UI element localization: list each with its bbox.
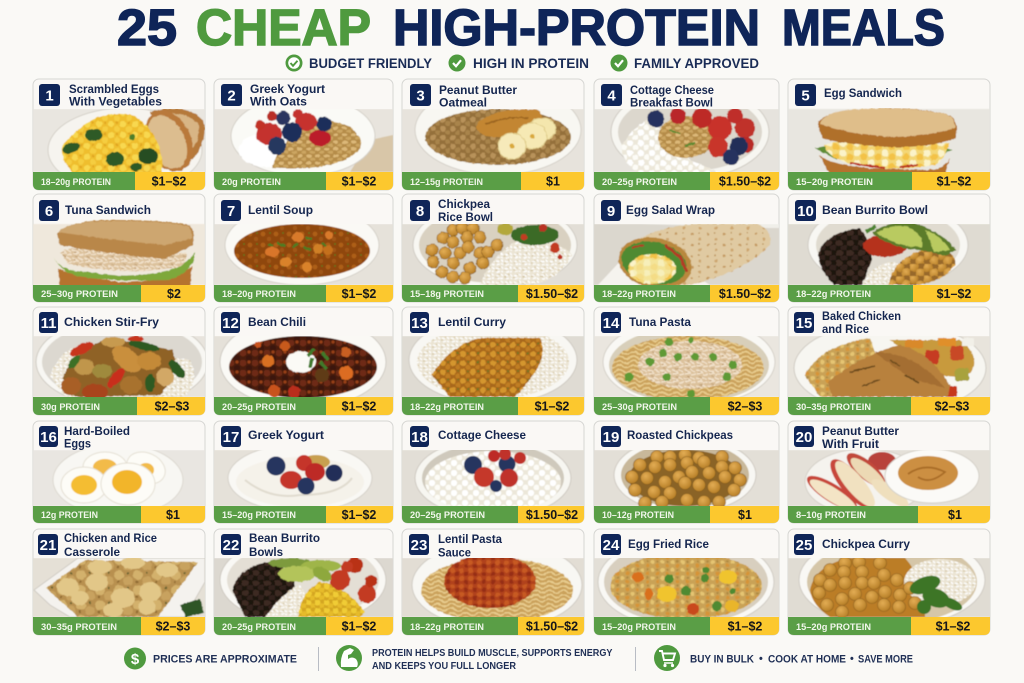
card 21: chicken and rice casserole: [33, 529, 205, 635]
protein label: 25–30g PROTEIN: [41, 289, 118, 300]
protein label: 20–25g PROTEIN: [410, 510, 485, 521]
price: [710, 285, 779, 302]
badge 24: [601, 534, 621, 555]
badge 21: 21: [40, 537, 56, 554]
badge 22: 22: [223, 537, 239, 554]
price: [137, 397, 205, 415]
protein label: 20–25g PROTEIN: [602, 177, 677, 188]
price: [710, 506, 779, 523]
badge 7: 7: [227, 203, 235, 220]
meal name: Greek Yogurt: [250, 82, 325, 96]
protein label: [594, 506, 710, 523]
card 8: chickpea rice bowl: [402, 194, 584, 302]
price: $1–$2: [936, 620, 970, 634]
subtitle badges: [286, 54, 759, 72]
meal name: Tuna Sandwich: [65, 203, 151, 217]
food photo: [402, 450, 584, 506]
food photo: [594, 109, 779, 172]
badge 23: [409, 534, 429, 555]
protein label: 20–25g PROTEIN: [222, 622, 296, 633]
badge 2: [221, 84, 242, 106]
protein label: 15–20g PROTEIN: [222, 510, 296, 521]
badge 24: 24: [603, 537, 620, 554]
icon: dollar: $: [131, 651, 140, 668]
price: $1–$2: [152, 174, 186, 188]
food photo: [402, 224, 584, 285]
title: [117, 0, 945, 56]
meal name: Bowls: [249, 545, 283, 559]
protein label: 18–20g PROTEIN: [222, 289, 296, 300]
meal name: [438, 532, 502, 560]
badge 3: 3: [416, 88, 425, 104]
protein label: [33, 172, 135, 190]
badge 13: 13: [411, 315, 428, 332]
price: $1.50–$2: [526, 620, 578, 634]
meal name: Peanut Butter: [439, 83, 517, 97]
price: [518, 397, 584, 415]
meal name: Sauce: [438, 546, 471, 560]
protein label: [788, 285, 913, 302]
card 3: peanut butter oatmeal: [402, 79, 584, 190]
badge 5: [795, 84, 816, 106]
badge 11: 11: [41, 315, 56, 332]
protein label: [402, 285, 518, 302]
meal name: Chicken Stir-Fry: [64, 315, 159, 329]
protein label: 18–22g PROTEIN: [602, 289, 676, 300]
price: [326, 617, 393, 635]
food photo: [402, 541, 584, 629]
meal name: Egg Fried Rice: [628, 537, 709, 551]
badge 9: [601, 200, 621, 221]
meal name: With Vegetables: [69, 94, 162, 108]
meal name: Lentil Pasta: [438, 532, 502, 546]
badge 10: 10: [797, 203, 814, 220]
title: HIGH-PROTEIN: [393, 0, 760, 56]
meal name: Lentil Soup: [248, 203, 313, 217]
badge 23: 23: [411, 537, 427, 554]
food photo: [788, 450, 990, 506]
protein label: 15–18g PROTEIN: [410, 289, 484, 300]
meal name: Rice Bowl: [438, 210, 493, 224]
price: [911, 397, 990, 415]
card 6: tuna sandwich: [33, 194, 205, 302]
note: savings tips: SAVE MORE: [858, 654, 913, 666]
meal name: Chicken and Rice: [64, 531, 157, 545]
card 25: chickpea curry: [788, 529, 990, 635]
price: [518, 506, 584, 523]
price: [326, 397, 393, 415]
note: protein benefits: AND KEEPS YOU FULL LONGER: [372, 661, 517, 672]
price: [326, 506, 393, 523]
price: [710, 397, 779, 415]
badge 25: [794, 534, 814, 555]
badge 1: 1: [45, 88, 54, 104]
price: $1–$2: [937, 174, 971, 188]
meal name: and Rice: [822, 322, 869, 336]
label: high in protein: HIGH IN PROTEIN: [473, 56, 589, 71]
badge 17: 17: [223, 429, 239, 446]
meal name: Scrambled Eggs: [69, 82, 159, 96]
food photo: [214, 109, 393, 172]
badge 3: [410, 84, 431, 106]
badge 5: 5: [801, 88, 810, 104]
protein label: 20–25g PROTEIN: [222, 402, 296, 413]
meal name: Bean Burrito: [249, 531, 320, 545]
food photo: [594, 336, 779, 397]
price: [518, 285, 584, 302]
badge 19: [601, 426, 621, 447]
price: $1: [546, 174, 560, 188]
price: $1.50–$2: [719, 174, 771, 188]
badge 20: 20: [796, 429, 812, 446]
badge 15: 15: [796, 315, 812, 332]
protein label: [33, 506, 141, 523]
price: $2–$3: [728, 400, 762, 414]
price: [326, 285, 393, 302]
meal name: [64, 424, 130, 450]
price: $2–$3: [935, 400, 969, 414]
meal name: Lentil Curry: [438, 315, 506, 329]
protein label: [214, 285, 326, 302]
food photo: [788, 108, 990, 174]
protein label: [214, 397, 326, 415]
card 1: scrambled eggs with vegetables: [33, 79, 205, 192]
badge 17: [221, 426, 241, 447]
card 23: lentil pasta sauce: [402, 529, 584, 635]
protein label: [788, 506, 918, 523]
icon: check family approved: [610, 54, 628, 72]
note: savings tips: [690, 653, 913, 666]
badge 25: 25: [796, 537, 812, 554]
protein label: [594, 397, 710, 415]
price: $1.50–$2: [526, 287, 578, 301]
price: $1–$2: [342, 400, 376, 414]
meal name: Peanut Butter: [822, 424, 899, 438]
meal name: Tuna Pasta: [629, 315, 691, 329]
meal name: [439, 83, 517, 110]
badge 9: 9: [607, 203, 615, 220]
protein label: 12–15g PROTEIN: [410, 177, 483, 188]
food photo: [33, 220, 205, 287]
food photo: [33, 557, 205, 617]
note: savings tips: •: [759, 653, 763, 665]
footer: [124, 645, 913, 672]
protein label: 30–35g PROTEIN: [796, 402, 871, 413]
card 11: chicken stir-fry: [33, 307, 208, 415]
card 5: egg sandwich: [788, 79, 990, 190]
card 16: hard-boiled eggs: [33, 421, 205, 523]
price: [135, 172, 205, 190]
food photo: [594, 450, 779, 506]
protein label: 18–22g PROTEIN: [410, 622, 484, 633]
note: savings tips: BUY IN BULK: [690, 654, 754, 666]
protein label: [214, 172, 326, 190]
food photo: [33, 109, 205, 172]
protein label: [788, 617, 911, 635]
price: $1–$2: [937, 287, 971, 301]
price: [141, 506, 205, 523]
protein label: [402, 506, 518, 523]
icon: flexed arm: [336, 645, 362, 671]
protein label: [788, 397, 911, 415]
meal name: Egg Sandwich: [824, 86, 902, 100]
card 13: lentil curry: [402, 307, 584, 415]
meal name: Chickpea: [438, 197, 490, 211]
meal name: [630, 83, 714, 110]
badge 16: 16: [40, 429, 57, 446]
badge 1: [39, 84, 60, 106]
meal name: Baked Chicken: [822, 309, 901, 323]
protein label: [594, 172, 710, 190]
price: [913, 285, 990, 302]
note: savings tips: COOK AT HOME: [768, 654, 846, 666]
badge 8: 8: [416, 203, 424, 220]
meal name: With Fruit: [822, 437, 879, 451]
price: $1: [738, 508, 752, 522]
meal name: Roasted Chickpeas: [627, 428, 733, 442]
badge 18: 18: [411, 429, 428, 446]
food photo: [788, 224, 990, 285]
protein label: 10–12g PROTEIN: [602, 510, 674, 521]
meal name: Egg Salad Wrap: [626, 203, 715, 217]
card 7: lentil soup: [214, 194, 393, 302]
card 4: cottage cheese breakfast bowl: [594, 79, 779, 190]
meal name: Greek Yogurt: [248, 428, 324, 442]
note: prices: PRICES ARE APPROXIMATE: [153, 654, 297, 666]
icon: dollar: [124, 648, 146, 670]
price: $1.50–$2: [526, 508, 578, 522]
meal name: Eggs: [64, 436, 91, 450]
price: [912, 172, 990, 190]
protein label: 15–20g PROTEIN: [796, 622, 871, 633]
price: $1–$2: [342, 287, 376, 301]
food photo: [594, 224, 779, 285]
price: $1–$2: [535, 400, 569, 414]
price: $1: [948, 508, 962, 522]
meal name: [64, 531, 157, 559]
badge 2: 2: [227, 88, 236, 104]
price: [518, 617, 584, 635]
price: $1: [166, 508, 180, 522]
price: [710, 617, 779, 635]
icon: check budget friendly: [286, 54, 302, 72]
badge 11: [39, 312, 58, 333]
food photo: [214, 450, 393, 506]
card 24: egg fried rice: [594, 529, 779, 635]
card 19: roasted chickpeas: [594, 421, 779, 523]
protein label: 18–20g PROTEIN: [41, 177, 111, 188]
badge 6: [39, 200, 59, 221]
meal name: [69, 82, 162, 108]
protein label: [402, 617, 518, 635]
meal name: Bean Burrito Bowl: [822, 203, 928, 217]
meal name: [250, 82, 325, 108]
icon: shopping cart: [654, 645, 680, 671]
meal name: Oatmeal: [439, 96, 487, 110]
protein label: [788, 172, 912, 190]
meal name: Casserole: [64, 545, 120, 559]
protein label: [33, 397, 137, 415]
price: $1.50–$2: [719, 287, 771, 301]
meal name: Hard-Boiled: [64, 424, 130, 438]
title: MEALS: [782, 0, 945, 56]
protein label: 25–30g PROTEIN: [602, 402, 677, 413]
note: protein benefits: PROTEIN HELPS BUILD MUSCLE, SUPPORTS ENERGY: [372, 648, 613, 659]
price: $1–$2: [342, 620, 376, 634]
protein label: [594, 285, 710, 302]
protein label: [402, 172, 521, 190]
card 12: bean chili: [214, 307, 393, 415]
price: $1–$2: [342, 508, 376, 522]
card 15: baked chicken and rice: [788, 307, 990, 415]
protein label: 12g PROTEIN: [41, 510, 98, 521]
card 20: peanut butter with fruit: [788, 421, 990, 523]
note: savings tips: •: [850, 653, 854, 665]
badge 22: [221, 534, 241, 555]
badge 8: [410, 200, 430, 221]
protein label: [33, 285, 141, 302]
price: [521, 172, 584, 190]
protein label: 30–35g PROTEIN: [41, 622, 117, 633]
protein label: 15–20g PROTEIN: [602, 622, 676, 633]
protein label: [214, 617, 326, 635]
icon: check high in protein: [448, 54, 466, 72]
food photo: [214, 536, 393, 624]
price: $2–$3: [155, 400, 189, 414]
meal name: Cottage Cheese: [438, 428, 526, 442]
protein label: 18–22g PROTEIN: [796, 289, 871, 300]
price: [141, 617, 205, 635]
badge 6: 6: [45, 203, 53, 220]
badge 4: [601, 84, 622, 106]
food photo: [594, 535, 779, 629]
protein label: [402, 397, 518, 415]
card 22: bean burrito bowls: [214, 529, 393, 635]
badge 20: [794, 426, 814, 447]
meal name: Breakfast Bowl: [630, 96, 713, 110]
price: $2–$3: [156, 620, 190, 634]
protein label: 8–10g PROTEIN: [796, 510, 866, 521]
badge 7: [221, 200, 241, 221]
badge 21: [38, 534, 58, 555]
card 17: greek yogurt: [214, 421, 393, 523]
badge 14: 14: [603, 315, 620, 332]
protein label: 30g PROTEIN: [41, 402, 100, 413]
badge 15: [794, 312, 814, 333]
price: $1–$2: [342, 174, 376, 188]
badge 14: [601, 312, 621, 333]
meal name: Cottage Cheese: [630, 83, 714, 97]
badge 19: 19: [603, 429, 619, 446]
card 10: bean burrito bowl: [788, 194, 990, 302]
card 18: cottage cheese: [402, 421, 584, 523]
badge 12: 12: [222, 315, 239, 332]
note: protein benefits: [372, 648, 613, 672]
food photo: [214, 336, 393, 397]
meal name: Chickpea Curry: [822, 537, 910, 551]
price: [911, 617, 990, 635]
meal name: Bean Chili: [248, 315, 306, 329]
food photo: [33, 450, 205, 506]
title: 25: [117, 0, 177, 56]
meal name: [822, 424, 899, 451]
protein label: [33, 617, 141, 635]
card 2: greek yogurt with oats: [214, 79, 393, 190]
price: [710, 172, 779, 190]
card 14: tuna pasta: [594, 307, 779, 415]
meal name: [249, 531, 320, 559]
badge 4: 4: [607, 88, 616, 104]
price: [918, 506, 990, 523]
protein label: [214, 506, 326, 523]
protein label: [594, 617, 710, 635]
food photo: [33, 336, 205, 397]
price: [141, 285, 205, 302]
meal name: [438, 197, 493, 224]
price: [326, 172, 393, 190]
protein label: 15–20g PROTEIN: [796, 177, 873, 188]
price: $1–$2: [728, 620, 762, 634]
protein label: 20g PROTEIN: [222, 177, 281, 188]
badge 10: [795, 200, 816, 221]
food photo: [214, 224, 393, 285]
protein label: 18–22g PROTEIN: [410, 402, 484, 413]
label: budget friendly: BUDGET FRIENDLY: [309, 56, 432, 71]
food photo: [402, 336, 584, 397]
food photo: [788, 336, 990, 397]
meal name: [822, 309, 901, 336]
card 9: egg salad wrap: [594, 194, 779, 302]
title: CHEAP: [196, 0, 371, 56]
food photo: [402, 109, 584, 172]
food photo: [788, 533, 990, 627]
label: family approved: FAMILY APPROVED: [634, 56, 759, 71]
meal name: With Oats: [250, 94, 307, 108]
price: $2: [167, 287, 181, 301]
